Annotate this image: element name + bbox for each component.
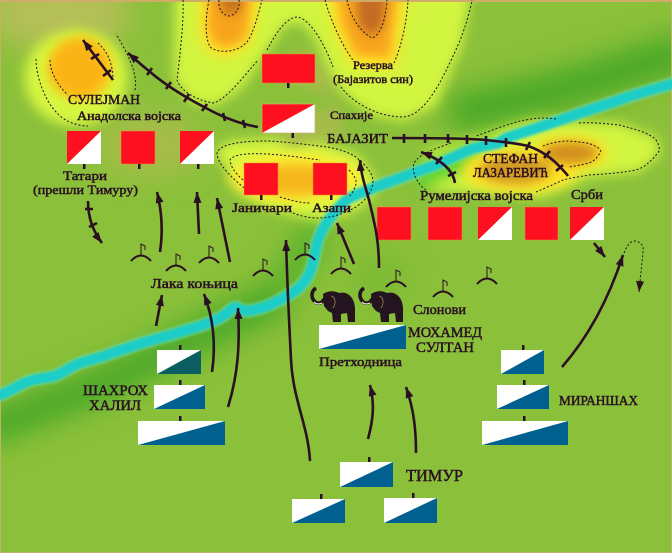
labels: Татари [63, 168, 107, 183]
icons: war elephants [312, 288, 403, 322]
arrow: rumelian manoeuvre [421, 152, 456, 183]
labels: Претходница [319, 355, 403, 369]
labels: СУЛТАН [416, 340, 474, 356]
arrows: vanguard advance [337, 160, 379, 268]
unit: vanguard flag [319, 325, 406, 349]
unit: anatolian flag red [121, 131, 155, 169]
arrow: timur central advance [286, 240, 310, 461]
arrow: dashed flank end [639, 282, 640, 292]
arrow: tatars desertion [85, 201, 102, 243]
terrain contour lines [36, 0, 659, 282]
labels: СТЕФАН [483, 152, 538, 167]
arrows: light cavalry advance [156, 192, 239, 407]
units: timur flags [292, 457, 437, 523]
labels: ШАХРОХ [83, 383, 149, 399]
labels: ЛАЗАРЕВИЋ [473, 166, 549, 181]
labels: Анадолска војска [77, 109, 182, 123]
labels: Спахије [330, 108, 373, 122]
arrow: serbs retreat [594, 243, 605, 257]
unit: anatolian flag split [180, 131, 214, 169]
arrow: miranshah advance [562, 255, 623, 367]
labels: Лака коњица [151, 277, 239, 292]
unit: azapi flag [313, 163, 347, 200]
river [0, 83, 672, 396]
labels: Резерва [353, 58, 394, 72]
unit: janissaries flag [244, 163, 278, 200]
units: rumelian army and serbs flags [377, 207, 604, 240]
labels: Слонови [413, 302, 466, 317]
arrow: suleiman retreat [83, 40, 113, 80]
labels: СУЛЕЈМАН [68, 93, 140, 108]
labels: МОХАМЕД [408, 325, 482, 341]
labels [33, 58, 638, 485]
labels: (прешли Тимуру) [33, 182, 138, 197]
labels: ТИМУР [406, 466, 463, 485]
arrow: ottoman left wing [128, 53, 258, 128]
labels: Азапи [312, 200, 351, 215]
labels: БАЈАЗИТ [327, 132, 388, 147]
labels: Срби [571, 188, 604, 203]
unit: tatars flag [67, 131, 101, 169]
labels: (Бајазитов син) [333, 72, 413, 86]
unit: reserve flag [262, 54, 315, 88]
labels: Јаничари [232, 200, 292, 215]
units: shahrokh and halil flags [138, 345, 225, 445]
labels: МИРАНШАХ [559, 394, 638, 409]
labels: Румелијска војска [420, 189, 534, 204]
arrows: timur forward [368, 385, 416, 453]
units: miranshah flags [482, 345, 568, 445]
arrow: bayezid line [392, 134, 568, 176]
labels: ХАЛИЛ [89, 398, 141, 414]
icons: light cavalry [131, 243, 497, 297]
unit: spahi flag [262, 104, 315, 138]
